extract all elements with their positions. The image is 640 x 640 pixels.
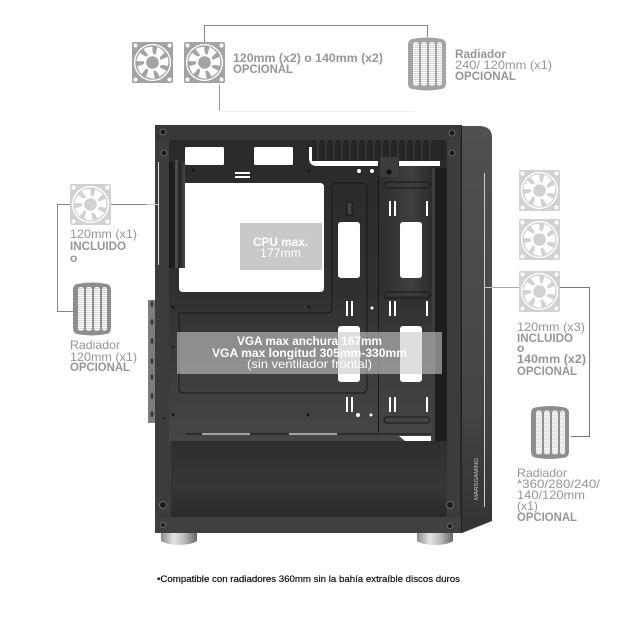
label: right fans: 140mm (x2) (517, 352, 586, 366)
label: left fan: INCLUIDO (70, 239, 126, 253)
PSU shroud (171, 441, 447, 517)
feet (161, 533, 453, 545)
VGA clearance label: VGA max anchura 167mm (237, 334, 382, 348)
VGA clearance label: VGA max longitud 305mm-330mm (212, 346, 407, 360)
tray screws (163, 168, 310, 419)
label: right radiator: 140/120mm (517, 488, 585, 502)
front panel: MARSGAMING (474, 458, 480, 500)
label: right radiator: Radiador (517, 466, 567, 480)
motherboard tray outlines (179, 175, 432, 434)
icon: right radiator (531, 406, 569, 459)
motherboard opening (179, 183, 324, 292)
label: right radiator: OPCIONAL (517, 510, 577, 524)
footnote: •Compatible con radiadores 360mm sin la bahía extraíble discos duros (157, 574, 461, 584)
drive bay sheen (379, 166, 433, 296)
label: left radiator (70, 338, 137, 374)
rear expansion brackets (148, 300, 156, 423)
label: right fans: o (517, 341, 524, 355)
label: right radiator (517, 466, 601, 524)
label: left fan (70, 227, 137, 265)
icon: left radiator (73, 282, 111, 336)
top panel edge (155, 125, 461, 140)
label: right fans: INCLUIDO (517, 331, 573, 345)
label: top radiator (455, 47, 552, 83)
rear fan (169, 160, 185, 268)
small rear latch (347, 202, 352, 215)
label: right fans: 120mm (x3) (517, 320, 585, 334)
top radiator fins (309, 140, 445, 177)
label: left fan: 120mm (x1) (70, 227, 137, 241)
PC case (146, 125, 492, 545)
label: left radiator: OPCIONAL (70, 360, 130, 374)
label: right radiator: *360/280/240/ (517, 477, 601, 491)
icon: top radiator (408, 38, 446, 90)
label: top fans: OPCIONAL (233, 62, 293, 76)
drive tray cutouts (202, 169, 431, 441)
connector lines (58, 26, 590, 436)
icon: left fan (70, 184, 111, 225)
label: top radiator: OPCIONAL (455, 69, 516, 83)
label: right radiator: (x1) (517, 499, 538, 513)
CPU clearance label (240, 223, 322, 270)
top cutouts (185, 147, 293, 178)
label: top radiator: 240/ 120mm (x1) (455, 58, 552, 72)
front fans (432, 168, 447, 441)
label: top fans: 120mm (x2) o 140mm (x2) (233, 51, 383, 65)
CPU clearance label: 177mm (260, 246, 301, 260)
interior back plate (169, 140, 447, 442)
icons: right fans (519, 170, 560, 312)
label: left fan: o (70, 251, 77, 265)
pale rear connector (146, 204, 159, 205)
label: left radiator: 120mm (x1) (70, 350, 137, 364)
vertical rear highlight (158, 162, 159, 265)
bottom bar (155, 517, 461, 533)
label: right fans: OPCIONAL (517, 364, 577, 378)
label: top fans (233, 51, 383, 76)
CPU clearance label: CPU max. (253, 235, 308, 249)
label: top radiator: Radiador (455, 47, 506, 61)
label: right fans (517, 320, 586, 378)
icons: top fans (132, 42, 225, 83)
screws (160, 129, 455, 528)
VGA clearance label (177, 332, 442, 374)
VGA clearance label: (sin ventilador frontal) (247, 357, 372, 371)
case frame (155, 125, 462, 533)
front panel (460, 126, 492, 533)
label: left radiator: Radiador (70, 338, 120, 352)
